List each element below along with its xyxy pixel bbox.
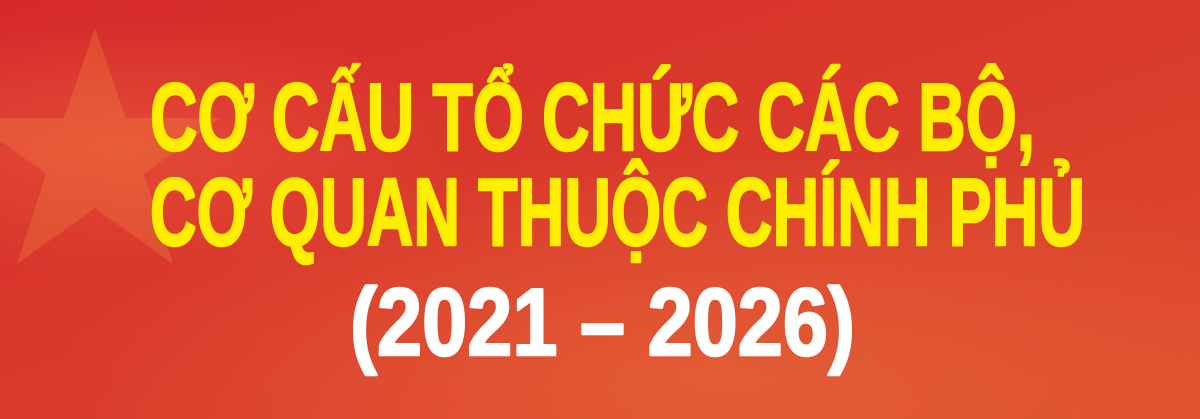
title line 3: years: (2021 – 2026) [350,269,855,376]
icon: flag star [0,28,221,264]
title [150,63,1085,376]
